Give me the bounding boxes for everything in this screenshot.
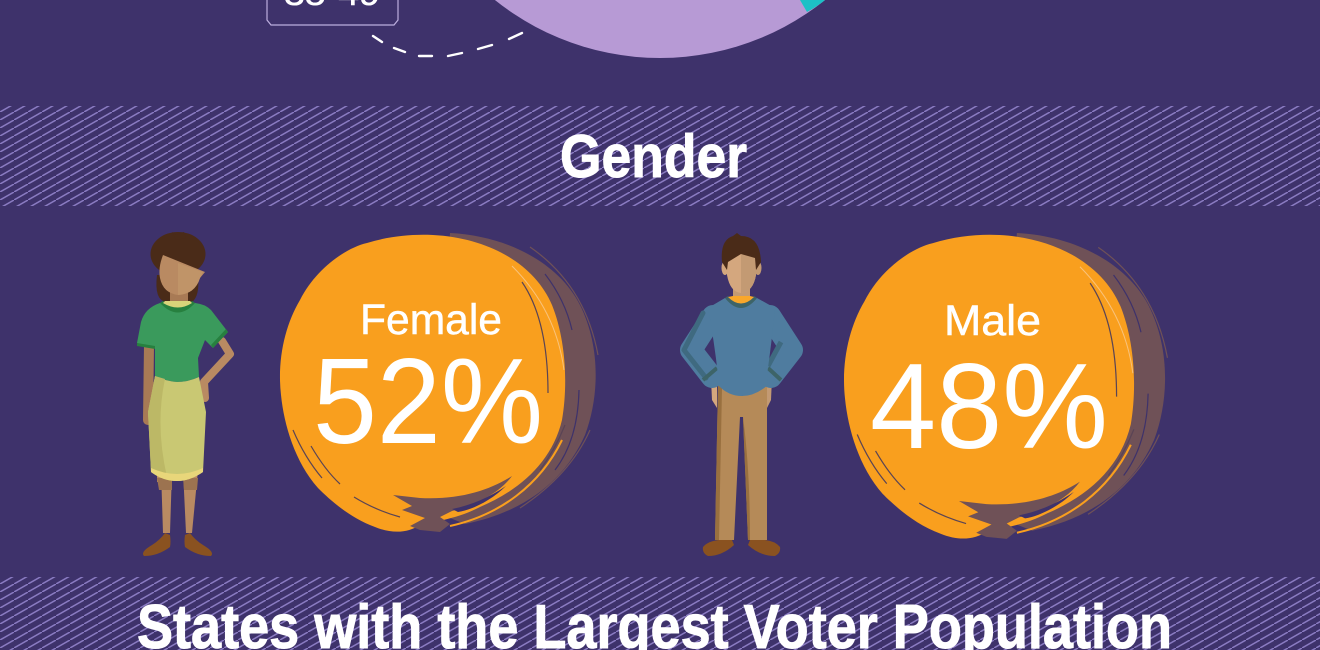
brush stroke: female shadow [430, 233, 596, 524]
brush strokes: male disc [844, 233, 1167, 539]
section band: states [0, 577, 1320, 650]
brush detail lines [293, 282, 565, 517]
dashed arrow connector [373, 33, 522, 56]
brush stroke: outer thin lines [520, 247, 598, 508]
section band: gender [0, 106, 1320, 206]
badge: male 48% [844, 233, 1167, 539]
brush stroke: female lower streak [393, 476, 512, 532]
label: male: Male [944, 297, 1041, 345]
value: 48%: 48% [870, 338, 1108, 474]
badge: female 52% [280, 233, 598, 532]
figure: man [684, 233, 792, 556]
value: 52%: 52% [313, 333, 543, 469]
brush stroke: orange rim [450, 440, 562, 526]
heading: gender: Gender [560, 123, 747, 190]
pie chart bottom segment [396, 0, 924, 58]
figure: woman [137, 232, 230, 556]
brush stroke: female orange disc [280, 235, 565, 532]
age label box [267, 0, 398, 25]
label: female: Female [360, 296, 502, 344]
